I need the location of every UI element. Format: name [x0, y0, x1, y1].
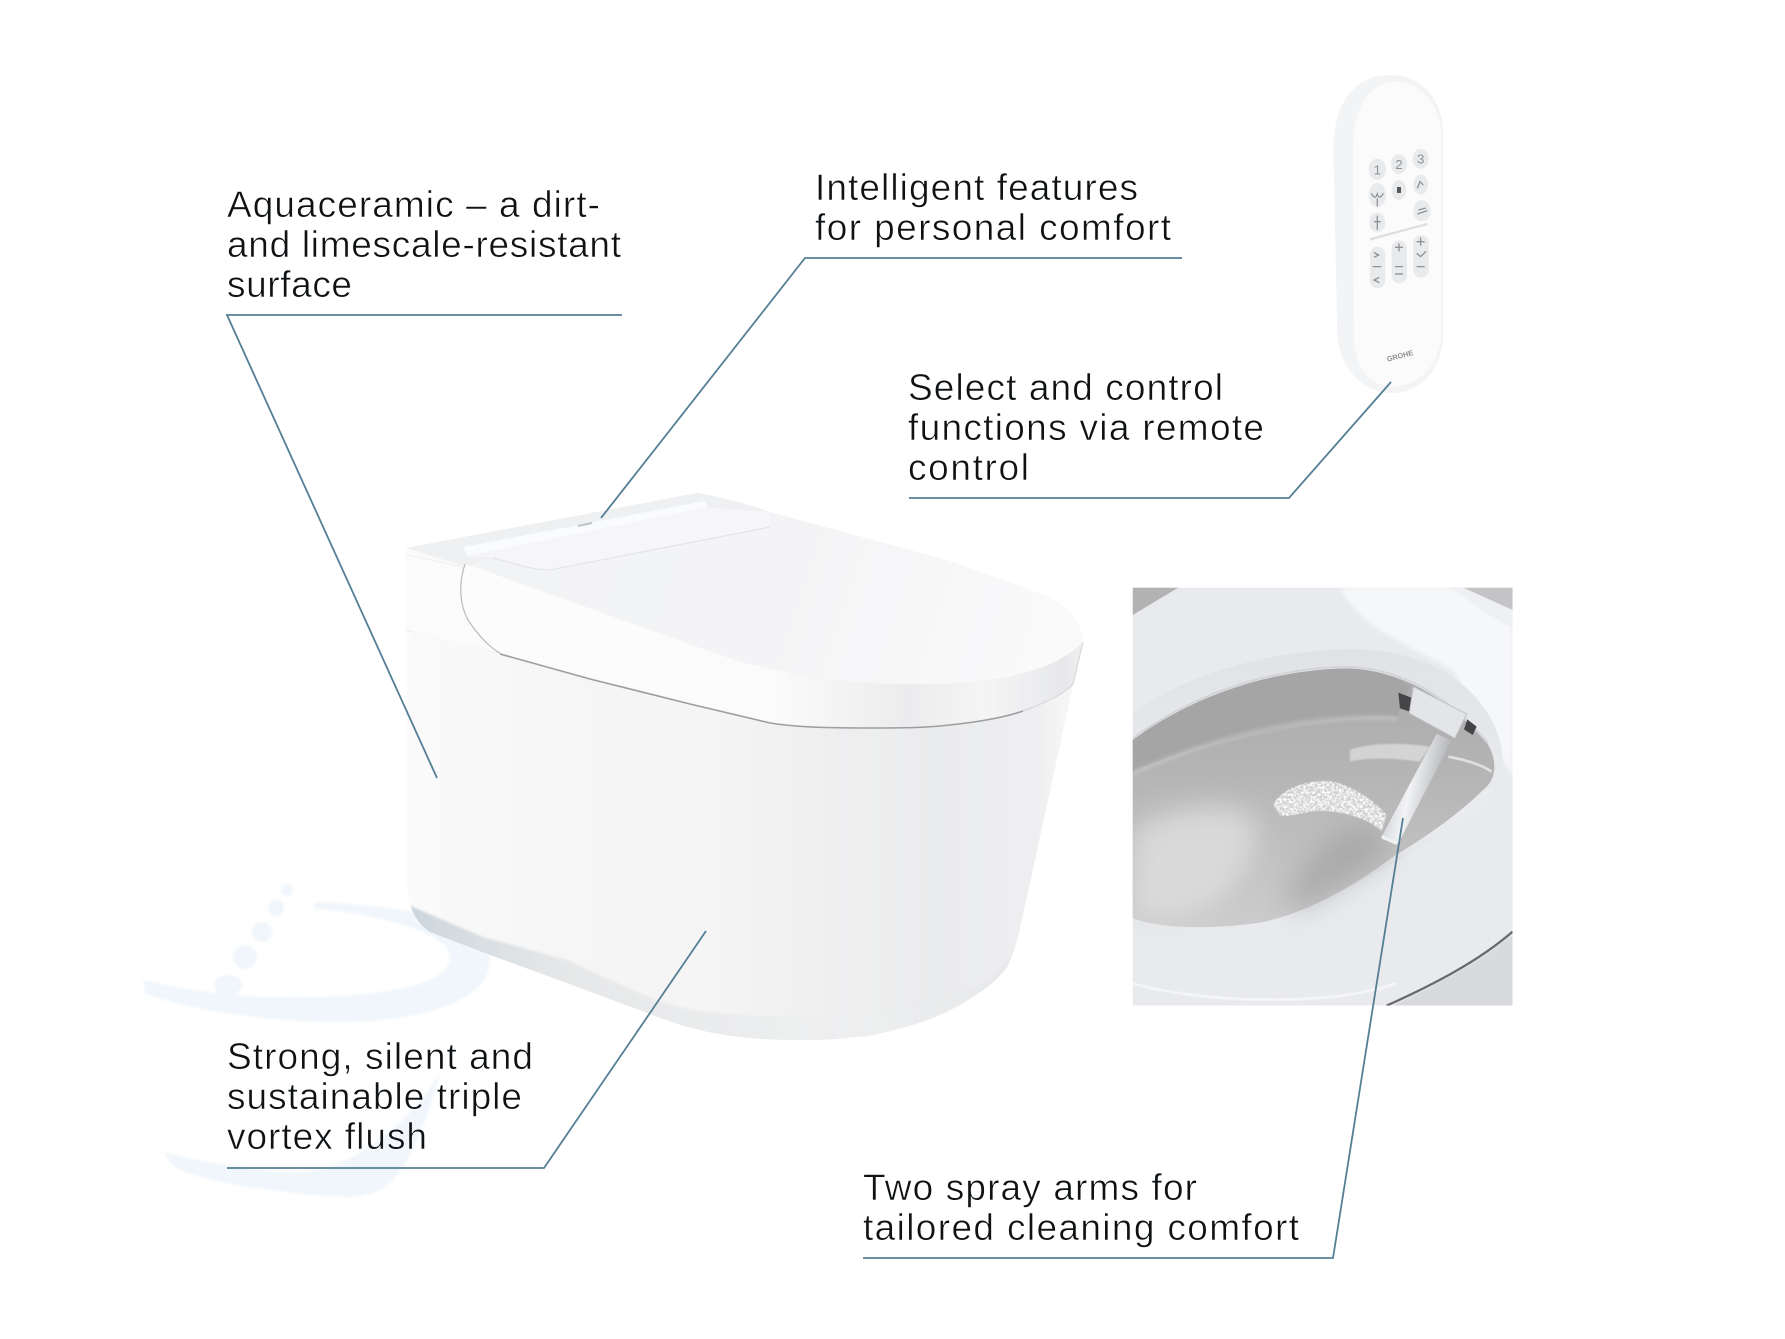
callout: Intelligent features: for personal comfort [815, 207, 1172, 248]
keypad symbols [1371, 182, 1427, 283]
callout: remote control [908, 367, 1391, 498]
rear arm reflection [1350, 744, 1430, 762]
callout: Intelligent features: Intelligent features [815, 167, 1138, 208]
remote face [1353, 82, 1441, 387]
remote body [1333, 75, 1443, 393]
callout: Aquaceramic: and limescale-resistant [227, 224, 622, 265]
callout: Aquaceramic: Aquaceramic – a dirt- [227, 184, 600, 225]
remote control [1333, 75, 1443, 393]
keypad numbers: 1 [1374, 162, 1381, 177]
keypad numbers [1374, 152, 1424, 177]
lighter seat highlight [1340, 588, 1513, 777]
callout: remote control: control [908, 447, 1029, 488]
dark corner top right [1452, 588, 1512, 610]
lid front edge [461, 564, 1083, 727]
tank rear edge [406, 555, 465, 568]
indicator button [578, 523, 592, 526]
toilet bowl body [406, 500, 1083, 1040]
upper bowl band [1133, 668, 1410, 772]
keypad divider [1370, 224, 1427, 239]
arm mount recess [1398, 693, 1477, 735]
top right light strip [1452, 588, 1512, 618]
front rim lower line [1133, 983, 1397, 1000]
bowl ridge highlight [1133, 718, 1397, 773]
keypad numbers: 2 [1395, 157, 1403, 172]
tank side panel [406, 555, 500, 653]
rim ring [1457, 681, 1502, 757]
outer right panel [1393, 935, 1513, 1006]
water pool [1133, 806, 1256, 919]
tank top block [406, 493, 770, 570]
callout: flush: sustainable triple [227, 1076, 522, 1117]
keypad numbers: 3 [1417, 152, 1424, 167]
callout: flush [227, 931, 706, 1168]
panel outline [493, 527, 770, 570]
seat panel [470, 507, 770, 570]
bowl interior [1133, 668, 1494, 927]
bowl rim contour [1133, 667, 1488, 743]
bowl centre depression [1287, 823, 1387, 913]
callout: Aquaceramic: surface [227, 264, 352, 305]
callout: remote control: functions via remote [908, 407, 1264, 448]
lid bottom shadow line [500, 654, 1023, 728]
callout: Intelligent features [601, 167, 1182, 518]
callout: remote control: Select and control [908, 367, 1223, 408]
water spray [1273, 781, 1387, 831]
dark corner top left [1133, 588, 1178, 615]
callout: spray arms: Two spray arms for [863, 1167, 1197, 1208]
spray arm tip [1382, 835, 1398, 845]
brand logo: GROHE [1386, 348, 1414, 364]
callout: Aquaceramic [227, 184, 622, 778]
rear tank seam [406, 630, 500, 653]
callout: spray arms: tailored cleaning comfort [863, 1207, 1300, 1248]
toilet illustration [395, 493, 1083, 1070]
lid left contour [461, 564, 500, 653]
inset: spray arm close-up [1133, 588, 1513, 1006]
spray arm mount [1409, 687, 1467, 738]
lid corner contour [1023, 642, 1083, 711]
callout: spray arms [863, 818, 1403, 1258]
callout: flush: vortex flush [227, 1116, 427, 1157]
control panel strip [463, 501, 708, 556]
callout: flush: Strong, silent and [227, 1036, 533, 1077]
water swirl background graphic [143, 884, 490, 1197]
keypad buttons [1369, 149, 1431, 288]
toilet base band [410, 905, 741, 1036]
spray arm tube [1382, 734, 1452, 843]
reflection strip [1448, 757, 1492, 772]
lid top surface [406, 493, 1083, 684]
inset background [1133, 588, 1513, 1006]
front rim dark edge [1387, 932, 1513, 1006]
